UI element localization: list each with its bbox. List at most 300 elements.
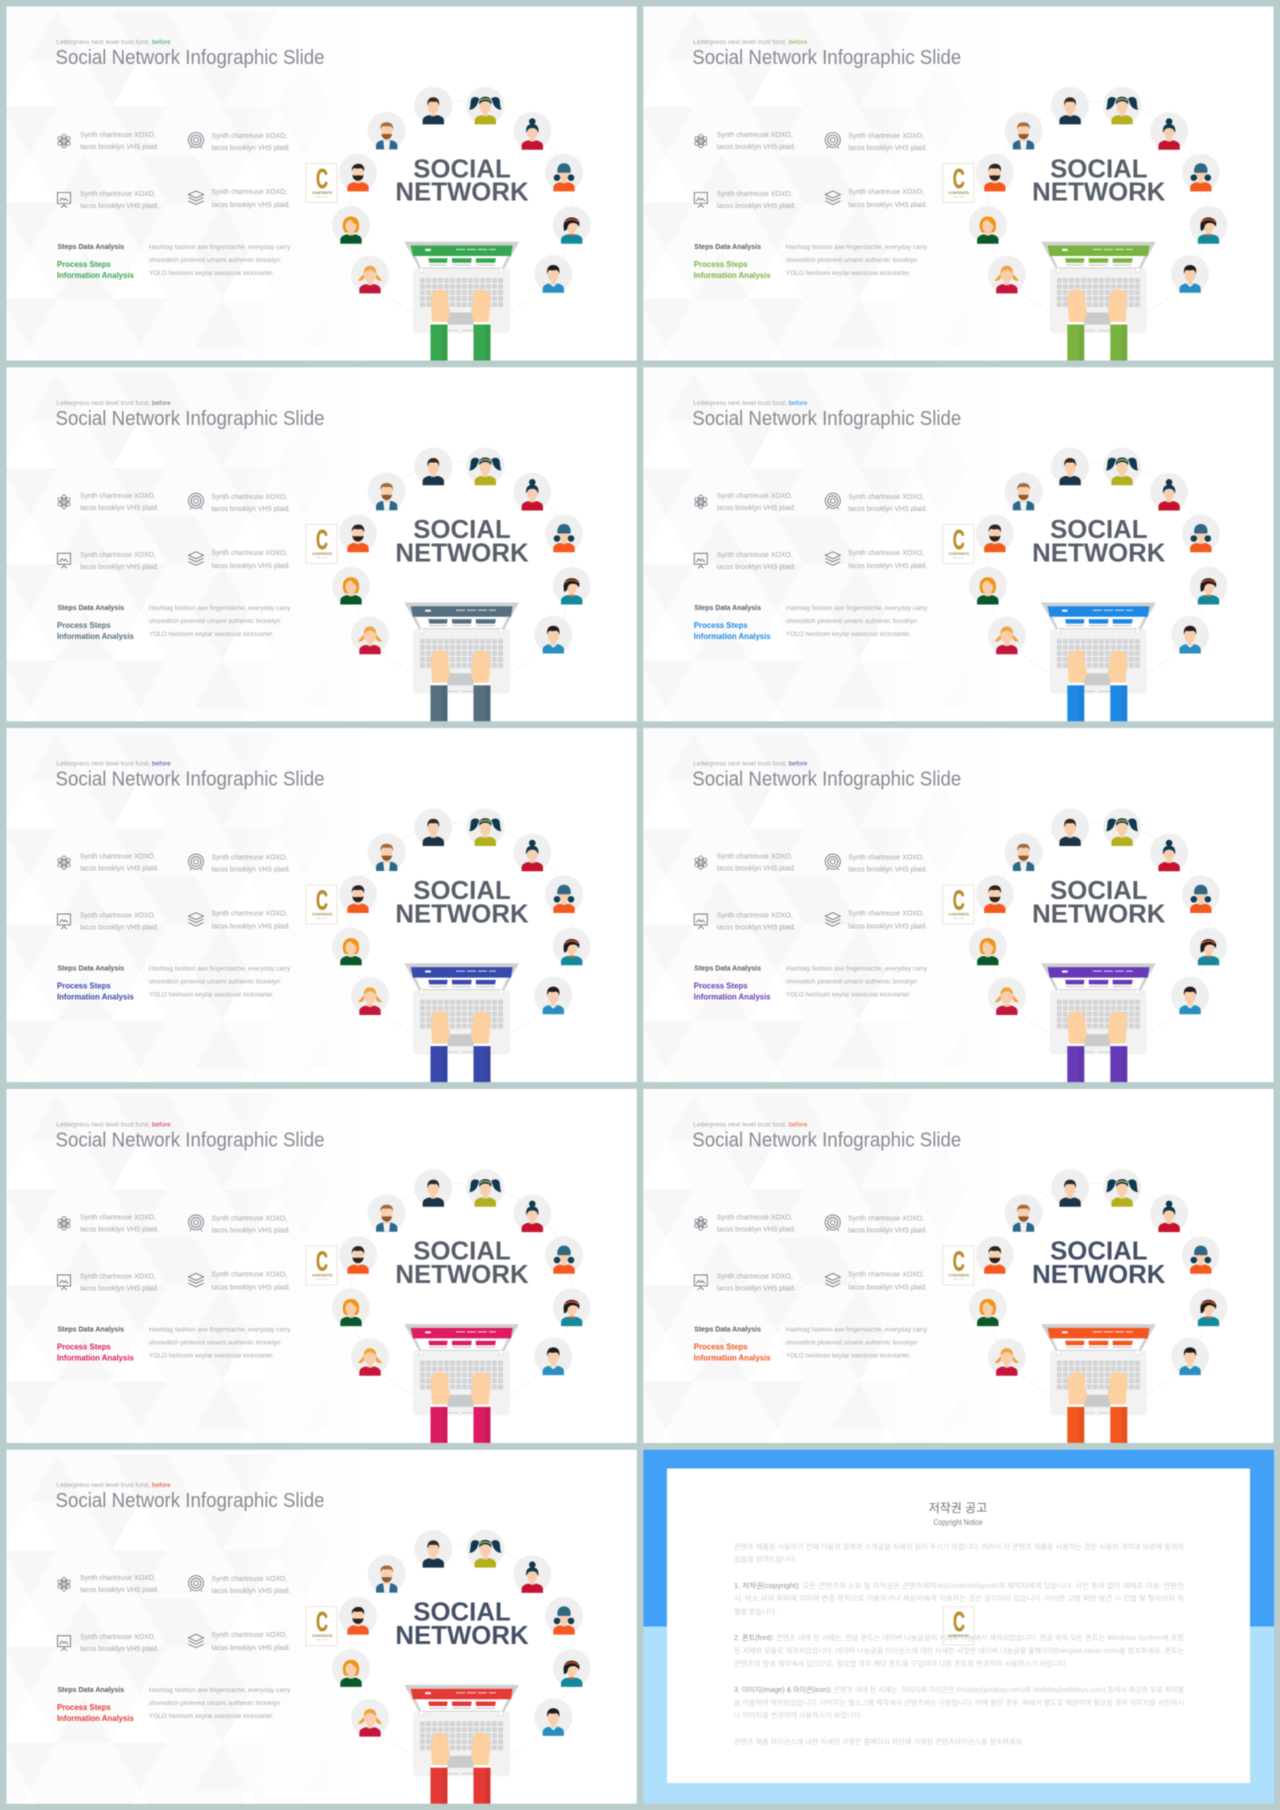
person: woman blue hair (1182, 1236, 1220, 1274)
feature text 4: Synth chartreuse XOXO, (212, 1271, 287, 1278)
central heading: SOCIAL (1050, 877, 1148, 905)
icon: atom (693, 134, 708, 148)
paragraph: shoreditch pinterest umami authentic brooklyn (149, 618, 281, 625)
feature text 2: tacos brooklyn VHS plaid. (212, 1588, 290, 1595)
icon: atom (57, 495, 71, 509)
icon: presentation board (694, 553, 708, 568)
person: woman orange hair (332, 206, 370, 244)
feature text 3: tacos brooklyn VHS plaid. (80, 925, 159, 932)
person: man blue shirt (534, 977, 572, 1015)
icon: target (188, 493, 204, 509)
feature text 1: Synth chartreuse XOXO, (80, 1575, 156, 1582)
icon: atom (57, 134, 71, 148)
feature text 4: Synth chartreuse XOXO, (848, 550, 924, 557)
logo badge: CONTENTS (949, 913, 969, 917)
feature text 1: Synth chartreuse XOXO, (80, 1214, 156, 1221)
eyebrow text: Letterpress next level trust fund, before (56, 400, 171, 407)
logo badge: CONTENTS (312, 552, 333, 556)
person: girl pigtails (466, 1530, 504, 1568)
person: girl pigtails (466, 448, 504, 486)
feature text 4: tacos brooklyn VHS plaid. (212, 924, 290, 931)
person: woman bun (513, 473, 551, 511)
icon: target (188, 1576, 204, 1592)
person: girl orange pigtails (988, 977, 1026, 1015)
eyebrow text: Letterpress next level trust fund, before (56, 1121, 171, 1128)
person: man navy (414, 1169, 452, 1207)
eyebrow text: Letterpress next level trust fund, before (693, 39, 808, 46)
coloured labels: Information Analysis (694, 1353, 771, 1362)
paragraph: YOLO heirloom keytar waistcoat kickstarter. (149, 631, 274, 638)
paragraph: Hashtag fashion axe fingerstache, everyday carry (149, 1687, 290, 1694)
slide title: Social Network Infographic Slide (56, 1129, 324, 1151)
network ring (987, 462, 1209, 684)
coloured labels: Process Steps (694, 621, 748, 630)
person: girl orange pigtails (351, 256, 389, 294)
person: girl pigtails (1103, 87, 1141, 125)
icon: presentation board (57, 192, 71, 208)
logo badge: CONTENTS (312, 913, 333, 917)
icon: target (825, 1215, 840, 1231)
central heading: SOCIAL (413, 1598, 511, 1626)
central heading: NETWORK (395, 539, 529, 567)
person: bearded man jacket (1004, 1194, 1042, 1232)
panel: slide 6 purple (639, 728, 1277, 1117)
panel: slide 4 blue (639, 367, 1277, 756)
icon: layers (825, 1273, 840, 1287)
person: man navy (1051, 87, 1089, 125)
panel: slide 7 pink (2, 1089, 640, 1477)
feature text 4: tacos brooklyn VHS plaid. (212, 1645, 290, 1652)
paragraph: shoreditch pinterest umami authentic brooklyn (786, 257, 918, 264)
blue background upper (643, 1450, 1274, 1626)
paragraph: YOLO heirloom keytar waistcoat kickstarter. (786, 631, 911, 638)
icon: layers (825, 191, 840, 204)
coloured labels: Information Analysis (57, 632, 134, 641)
person: man blue shirt (1171, 255, 1209, 293)
icon: atom (57, 856, 71, 869)
notice section 3 line 3: 나 이미지를 변경하여 사용하시기 바랍니다. (734, 1711, 862, 1720)
person: bearded man orange (339, 1236, 377, 1274)
notice section 1 line 3: 벌을 받습니다. (734, 1607, 777, 1616)
logo badge (943, 524, 974, 563)
feature text 2: Synth chartreuse XOXO, (212, 133, 287, 140)
network ring (350, 1183, 572, 1405)
paragraph: Hashtag fashion axe fingerstache, everyday carry (149, 244, 290, 251)
slide title: Social Network Infographic Slide (56, 408, 324, 430)
notice section 3 line 1: 3. 이미지(image) & 아이콘(icon): 콘텐츠 내에 된 서체는, 이미지와 아이콘은 Pixabay(pixabay.com)와 Webdoy(webdoys.com) 등에서 제공한 무료 저작물 (734, 1685, 1185, 1694)
slide title: Social Network Infographic Slide (56, 47, 324, 69)
paragraph: shoreditch pinterest umami authentic brooklyn (786, 618, 918, 625)
notice section 2 line 3: 콘텐츠의 할애 제작에서 있으므로, 필요할 경우 해당 폰트를 구입하여 다른 폰트로 변경하여 사용하시기 바랍니다. (734, 1659, 1068, 1668)
feature text 2: tacos brooklyn VHS plaid. (212, 145, 290, 152)
feature text 2: Synth chartreuse XOXO, (848, 855, 924, 862)
person: bearded man orange (339, 514, 377, 552)
central heading: SOCIAL (413, 155, 511, 183)
feature text 3: Synth chartreuse XOXO, (717, 191, 793, 198)
person: bearded man jacket (1004, 833, 1042, 871)
person: girl pigtails (1103, 448, 1141, 486)
panel: slide 8 orange (639, 1089, 1277, 1477)
person: girl orange pigtails (988, 1338, 1026, 1376)
feature text 2: Synth chartreuse XOXO, (212, 1215, 287, 1222)
feature text 3: Synth chartreuse XOXO, (717, 1273, 793, 1280)
coloured labels: Process Steps (57, 621, 111, 630)
icon: layers (188, 913, 204, 926)
slide background with triangles (639, 1089, 1277, 1477)
person: woman headband (1190, 567, 1228, 605)
logo badge: REAL CORP (316, 556, 328, 559)
paragraph: YOLO heirloom keytar waistcoat kickstarter. (149, 1352, 274, 1359)
person: woman headband (553, 206, 591, 244)
person: bearded man jacket (368, 1555, 406, 1593)
panel: slide 3 slate (2, 367, 640, 756)
eyebrow text: Letterpress next level trust fund, before (56, 39, 171, 46)
central heading: NETWORK (1032, 179, 1166, 207)
steps heading: Steps Data Analysis (694, 605, 761, 612)
logo badge: REAL CORP (316, 196, 328, 198)
white notice card (667, 1468, 1250, 1783)
feature text 3: tacos brooklyn VHS plaid. (80, 1646, 159, 1653)
person: man blue shirt (1171, 1337, 1209, 1375)
feature text 4: tacos brooklyn VHS plaid. (848, 1284, 927, 1291)
person: man blue shirt (534, 255, 572, 293)
central heading: NETWORK (1032, 1261, 1166, 1289)
logo badge: CONTENTS (949, 191, 969, 195)
feature text 4: tacos brooklyn VHS plaid. (848, 924, 927, 931)
paragraph: YOLO heirloom keytar waistcoat kickstarter. (786, 992, 911, 999)
coloured labels: Information Analysis (57, 1353, 134, 1362)
logo badge: REAL CORP (953, 917, 965, 920)
logo badge (943, 163, 974, 202)
logo badge: CONTENTS (312, 1634, 333, 1638)
feature text 4: Synth chartreuse XOXO, (212, 550, 287, 557)
feature text 4: tacos brooklyn VHS plaid. (848, 563, 927, 570)
logo badge: CONTENTS (312, 1273, 333, 1277)
person: woman orange hair (969, 1288, 1007, 1326)
steps heading: Steps Data Analysis (58, 244, 124, 251)
icon: presentation board (57, 553, 71, 568)
feature text 4: tacos brooklyn VHS plaid. (212, 202, 290, 209)
feature text 3: tacos brooklyn VHS plaid. (717, 925, 796, 932)
steps heading: Steps Data Analysis (58, 1687, 124, 1694)
logo badge: CONTENTS (949, 552, 969, 556)
coloured labels: Process Steps (57, 260, 111, 269)
network ring (987, 101, 1209, 323)
person: man blue shirt (1171, 977, 1209, 1015)
person: woman orange hair (969, 206, 1007, 244)
person: woman headband (1190, 928, 1228, 966)
icon: target (825, 493, 840, 509)
icon: layers (188, 1634, 204, 1648)
feature text 1: Synth chartreuse XOXO, (717, 854, 793, 861)
feature text 4: Synth chartreuse XOXO, (212, 189, 287, 196)
person: girl pigtails (1103, 808, 1141, 846)
logo badge: REAL CORP (953, 556, 965, 559)
feature text 1: Synth chartreuse XOXO, (80, 493, 156, 500)
eyebrow text: Letterpress next level trust fund, before (56, 761, 171, 768)
person: bearded man jacket (368, 112, 406, 150)
person: woman bun (1150, 473, 1188, 511)
feature text 4: tacos brooklyn VHS plaid. (212, 1284, 290, 1291)
laptop with typing hands (404, 602, 519, 721)
feature text 3: tacos brooklyn VHS plaid. (80, 564, 159, 571)
paragraph: shoreditch pinterest umami authentic brooklyn (149, 979, 281, 986)
icon: target (825, 132, 840, 148)
person: woman headband (1190, 206, 1228, 244)
feature text 3: tacos brooklyn VHS plaid. (717, 203, 796, 210)
person: bearded man jacket (368, 472, 406, 510)
feature text 1: tacos brooklyn VHS plaid. (717, 505, 796, 512)
central heading: NETWORK (395, 1261, 529, 1289)
person: woman bun (1150, 112, 1188, 150)
logo badge: C (316, 524, 328, 555)
icon: layers (188, 552, 204, 565)
icon: layers (825, 552, 840, 565)
person: woman orange hair (969, 567, 1007, 605)
feature text 3: Synth chartreuse XOXO, (80, 1273, 156, 1280)
person: bearded man jacket (1004, 472, 1042, 510)
feature text 3: Synth chartreuse XOXO, (80, 913, 156, 920)
logo badge (943, 1245, 974, 1285)
laptop with typing hands (1041, 242, 1156, 360)
central heading: SOCIAL (1050, 516, 1148, 544)
slide title: Social Network Infographic Slide (692, 408, 961, 430)
coloured labels: Information Analysis (57, 271, 134, 280)
slide background with triangles (639, 6, 1277, 395)
logo badge: REAL CORP (316, 1278, 328, 1281)
laptop with typing hands (404, 242, 519, 360)
person: woman blue hair (1182, 875, 1220, 913)
icon: layers (188, 191, 204, 204)
paragraph: Hashtag fashion axe fingerstache, everyday carry (149, 1326, 290, 1333)
coloured labels: Information Analysis (57, 1714, 134, 1723)
person: man navy (414, 87, 452, 125)
person: girl orange pigtails (988, 256, 1026, 294)
person: man blue shirt (534, 1698, 572, 1736)
icon: atom (693, 856, 708, 869)
central heading: SOCIAL (1050, 1238, 1148, 1266)
feature text 1: tacos brooklyn VHS plaid. (80, 866, 159, 873)
notice section 2 line 1: 2. 폰트(font): 콘텐츠 내에 된 서체는, 한글 폰트는 네이버 나눔글꼴의 서체와 나눔에서 제작되었습니다. 한글 외의 모든 폰트는 Windows System에 포함 (734, 1633, 1185, 1642)
logo badge: CONTENTS (312, 191, 333, 195)
paragraph: Hashtag fashion axe fingerstache, everyday carry (149, 966, 290, 973)
icon: presentation board (694, 914, 708, 929)
icon: presentation board (57, 1275, 71, 1290)
person: woman orange hair (332, 1649, 370, 1687)
eyebrow text: Letterpress next level trust fund, before (693, 1121, 808, 1128)
panel: slide 1 green (2, 6, 640, 395)
feature text 1: tacos brooklyn VHS plaid. (717, 144, 796, 151)
person: woman headband (553, 928, 591, 966)
paragraph: YOLO heirloom keytar waistcoat kickstarter. (149, 1713, 274, 1720)
paragraph: shoreditch pinterest umami authentic brooklyn (149, 257, 281, 264)
feature text 2: Synth chartreuse XOXO, (848, 494, 924, 501)
eyebrow text: Letterpress next level trust fund, before (693, 761, 808, 768)
feature text 2: tacos brooklyn VHS plaid. (848, 867, 927, 874)
central heading: SOCIAL (413, 1238, 511, 1266)
logo badge: C (953, 885, 965, 916)
steps heading: Steps Data Analysis (58, 1326, 124, 1333)
network ring (350, 101, 572, 323)
notice section 1 line 1: 1. 저작권(copyright): 모든 콘텐츠의 소유 및 저작권은 콘텐츠제작사(Contentslayout)의 제작자에게 있습니다. 사전 동의 없이 재배포 이용, 전환전 (734, 1581, 1184, 1590)
feature text 1: Synth chartreuse XOXO, (717, 493, 793, 500)
logo badge (306, 1245, 337, 1285)
slide background with triangles (639, 367, 1277, 756)
person: girl orange pigtails (351, 977, 389, 1015)
central heading: SOCIAL (413, 877, 511, 905)
person: woman blue hair (545, 1597, 583, 1635)
person: girl orange pigtails (988, 616, 1026, 654)
paragraph: shoreditch pinterest umami authentic brooklyn (786, 1339, 918, 1346)
feature text 1: Synth chartreuse XOXO, (717, 132, 793, 139)
logo badge (306, 1606, 337, 1646)
panel: slide 9 red (2, 1450, 640, 1810)
person: girl pigtails (1103, 1169, 1141, 1207)
person: bearded man orange (976, 875, 1014, 913)
slide title: Social Network Infographic Slide (692, 769, 961, 791)
person: bearded man orange (339, 1597, 377, 1635)
paragraph: shoreditch pinterest umami authentic brooklyn (149, 1700, 281, 1707)
person: woman orange hair (332, 567, 370, 605)
feature text 4: tacos brooklyn VHS plaid. (848, 202, 927, 209)
steps heading: Steps Data Analysis (58, 966, 124, 973)
feature text 1: Synth chartreuse XOXO, (80, 132, 156, 139)
person: bearded man orange (339, 875, 377, 913)
logo badge: C (316, 163, 328, 194)
feature text 1: tacos brooklyn VHS plaid. (80, 144, 159, 151)
steps heading: Steps Data Analysis (694, 244, 761, 251)
feature text 3: tacos brooklyn VHS plaid. (80, 1285, 159, 1292)
logo badge: C (316, 885, 328, 916)
central heading: NETWORK (395, 1622, 529, 1650)
logo badge: REAL CORP (316, 917, 328, 920)
steps heading: Steps Data Analysis (694, 1326, 761, 1333)
coloured labels: Process Steps (694, 260, 748, 269)
panel: copyright notice slide (643, 1450, 1274, 1804)
central heading: SOCIAL (413, 516, 511, 544)
icon: target (825, 854, 840, 870)
person: man navy (1051, 1169, 1089, 1207)
feature text 4: Synth chartreuse XOXO, (212, 911, 287, 918)
paragraph: Hashtag fashion axe fingerstache, everyday carry (786, 1326, 927, 1333)
feature text 2: tacos brooklyn VHS plaid. (212, 506, 290, 513)
slide background with triangles (2, 1450, 640, 1810)
feature text 4: Synth chartreuse XOXO, (212, 1632, 287, 1639)
icon: target (188, 132, 204, 148)
person: woman orange hair (332, 928, 370, 966)
feature text 2: tacos brooklyn VHS plaid. (848, 145, 927, 152)
network ring (350, 462, 572, 684)
person: bearded man orange (976, 154, 1014, 192)
feature text 2: tacos brooklyn VHS plaid. (848, 1227, 927, 1234)
logo badge: C (953, 1245, 965, 1276)
feature text 1: tacos brooklyn VHS plaid. (717, 1226, 796, 1233)
person: man navy (414, 808, 452, 846)
notice title: 저작권 공고 (929, 1501, 987, 1515)
person: woman bun (513, 1555, 551, 1593)
person: girl pigtails (466, 87, 504, 125)
coloured labels: Process Steps (57, 1703, 111, 1712)
paragraph: Hashtag fashion axe fingerstache, everyday carry (149, 605, 290, 612)
panel: slide 2 light green (639, 6, 1277, 395)
icon: atom (693, 495, 708, 509)
feature text 4: Synth chartreuse XOXO, (848, 911, 924, 918)
logo badge: REAL CORP (316, 1639, 328, 1642)
icon: atom (57, 1577, 71, 1591)
steps heading: Steps Data Analysis (58, 605, 124, 612)
laptop with typing hands (1041, 1324, 1156, 1443)
laptop with typing hands (404, 1324, 519, 1443)
feature text 4: Synth chartreuse XOXO, (848, 189, 924, 196)
person: woman blue hair (545, 875, 583, 913)
slide background with triangles (2, 728, 640, 1117)
logo badge: C (316, 1245, 328, 1276)
central heading: NETWORK (395, 179, 529, 207)
logo badge: C (953, 163, 965, 194)
slide background with triangles (2, 1089, 640, 1477)
person: woman blue hair (545, 154, 583, 192)
eyebrow text: Letterpress next level trust fund, before (693, 400, 808, 407)
notice intro: 콘텐츠 제품을 사용하기 전에 다음의 항목과 소개글을 자세히 읽어 주시기 바랍니다. 따라서 이 콘텐츠 제품을 사용하는 것은 사용자 계약과 보증에 동의하 (734, 1542, 1185, 1551)
logo badge (306, 524, 337, 563)
paragraph: YOLO heirloom keytar waistcoat kickstarter. (149, 992, 274, 999)
person: girl orange pigtails (351, 1338, 389, 1376)
logo badge centre (943, 1606, 974, 1645)
notice section 1 line 2: 시, 비소 사이 위탁에 의하여 변경 목적으로 이용하거나 제삼자에게 이용하는 것은 금지되어 있습니다. 이러한 고발 위반 발견 시 민법 및 형사상의 처 (734, 1594, 1184, 1603)
paragraph: Hashtag fashion axe fingerstache, everyday carry (786, 605, 927, 612)
icon: presentation board (57, 914, 71, 929)
notice subtitle: Copyright Notice (934, 1518, 983, 1527)
feature text 3: Synth chartreuse XOXO, (80, 1634, 156, 1641)
person: woman blue hair (545, 514, 583, 552)
feature text 3: tacos brooklyn VHS plaid. (80, 203, 159, 210)
feature text 2: tacos brooklyn VHS plaid. (212, 867, 290, 874)
person: girl pigtails (466, 1169, 504, 1207)
feature text 1: tacos brooklyn VHS plaid. (80, 1587, 159, 1594)
feature text 2: tacos brooklyn VHS plaid. (848, 506, 927, 513)
logo badge centre: C (953, 1606, 965, 1637)
feature text 3: tacos brooklyn VHS plaid. (717, 1285, 796, 1292)
logo badge: C (316, 1606, 328, 1637)
paragraph: shoreditch pinterest umami authentic brooklyn (149, 1339, 281, 1346)
notice section 2 line 2: 된 서체와 모듈로 제작되었습니다. 네이버 나눔글꼴 라이선스에 대한 자세한 사항은 네이버 나눔글꼴 홈페이지(hangeul.naver.com)를 참조하세요. 폰트는 (734, 1646, 1185, 1655)
person: woman bun (513, 112, 551, 150)
logo badge: C (953, 524, 965, 555)
feature text 4: Synth chartreuse XOXO, (848, 1271, 924, 1278)
slide background with triangles (639, 728, 1277, 1117)
logo badge (306, 885, 337, 924)
central heading: SOCIAL (1050, 155, 1148, 183)
paragraph: YOLO heirloom keytar waistcoat kickstarter. (786, 270, 911, 277)
notice intro line 2: 셨음을 알려드립니다. (734, 1555, 797, 1564)
feature text 4: tacos brooklyn VHS plaid. (212, 563, 290, 570)
network ring (987, 823, 1209, 1045)
logo badge centre: CONTENTS (948, 1634, 969, 1638)
slide title: Social Network Infographic Slide (56, 1490, 324, 1512)
person: woman headband (553, 1288, 591, 1326)
slide background with triangles (2, 367, 640, 756)
person: girl orange pigtails (351, 1699, 389, 1737)
laptop with typing hands (1041, 963, 1156, 1082)
person: bearded man orange (339, 154, 377, 192)
person: bearded man orange (976, 514, 1014, 552)
coloured labels: Process Steps (57, 1342, 111, 1351)
logo badge (943, 885, 974, 924)
feature text 1: Synth chartreuse XOXO, (80, 854, 156, 861)
coloured labels: Information Analysis (694, 271, 771, 280)
icon: atom (693, 1217, 708, 1230)
feature text 3: Synth chartreuse XOXO, (80, 191, 156, 198)
